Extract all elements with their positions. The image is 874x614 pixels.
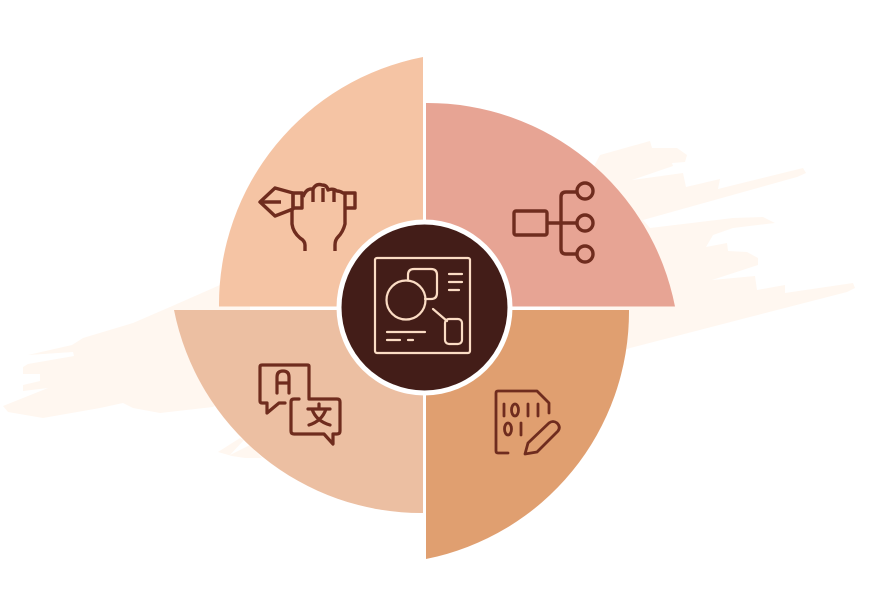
icon: hand holding pen [260,184,355,251]
icon: flow hierarchy [514,183,593,262]
icon: translation speech bubbles [260,365,340,444]
panel: bottom-right wedge [426,310,629,559]
background brush strokes [3,141,855,458]
panel: top-right wedge [426,103,675,306]
icon: center diagram document [375,258,470,353]
panel: bottom-left wedge [174,310,423,513]
icon: binary file with pencil [496,391,559,454]
panel: top-left wedge [219,57,423,306]
center circle [336,220,512,396]
